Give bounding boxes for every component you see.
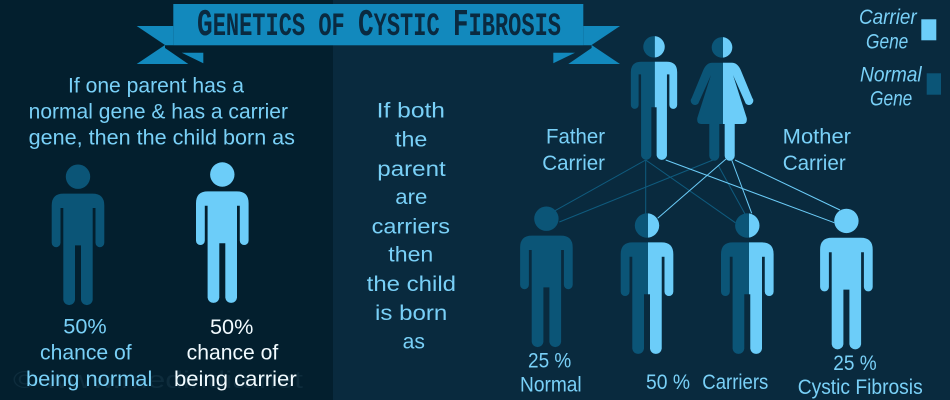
middle text: the child [367,273,456,296]
legend: carrier gene [859,6,936,53]
panel: left background [0,0,333,400]
label: father carrier: Father [546,125,605,148]
label: mother carrier [783,125,851,175]
middle text: carriers [372,215,450,238]
label: 50% normal: being normal [26,368,152,391]
label: 50% normal [26,315,152,391]
legend: carrier gene: Gene [866,30,908,53]
middle text: then [388,244,433,267]
label: 50% carrier [174,316,297,391]
label: 25% cystic fibrosis [798,352,923,399]
icon: carrier child figure [196,162,249,303]
icon: father figure [631,36,677,160]
legend: carrier gene: Carrier [859,6,918,29]
icon: carrier offspring two [721,213,774,354]
middle text: is born [375,302,447,325]
label: 50% carriers: 50 % [646,371,690,394]
label: 25% normal: Normal [520,374,582,397]
middle text: as [403,330,425,353]
left intro text: normal gene & has a carrier [29,101,288,124]
label: 50% carriers: Carriers [702,371,768,394]
label: 50% carrier: 50% [210,316,253,339]
icon: mother figure [691,37,753,161]
label: 50% normal: chance of [40,341,132,364]
left intro text: If one parent has a [68,75,244,98]
legend: normal gene: Normal [860,64,923,87]
label: 25% cystic fibrosis: Cystic Fibrosis [798,376,923,399]
label: 25% cystic fibrosis: 25 % [833,352,877,375]
label: 50% carrier: being carrier [174,368,297,391]
label: father carrier [542,125,605,175]
watermark: © www.medindia.net [13,367,303,394]
left intro text: gene, then the child born as [29,127,295,150]
middle text: the [395,129,427,152]
label: 25% normal: 25 % [528,350,571,373]
label: 50% carrier: chance of [187,341,278,364]
middle text: are [395,186,427,209]
label: mother carrier: Carrier [783,152,846,175]
middle text [367,100,456,353]
middle text: If both [377,100,445,123]
icon: cystic fibrosis offspring [820,209,873,349]
title banner: GENETICS OF CYSTIC FIBROSIS [197,4,561,47]
label: 50% carriers [646,371,768,394]
middle text: parent [377,158,446,181]
icon: carrier offspring one [621,213,673,354]
label: 25% normal [520,350,582,397]
label: 50% normal: 50% [63,315,107,338]
icon: normal offspring [520,206,573,347]
legend: normal gene: Gene [870,87,912,110]
inheritance lines [555,159,840,223]
left intro text [29,75,295,150]
icon: normal child figure [52,164,104,305]
label: mother carrier: Mother [783,125,851,148]
title banner [137,4,620,64]
legend: normal gene [860,64,941,110]
label: father carrier: Carrier [542,152,605,175]
